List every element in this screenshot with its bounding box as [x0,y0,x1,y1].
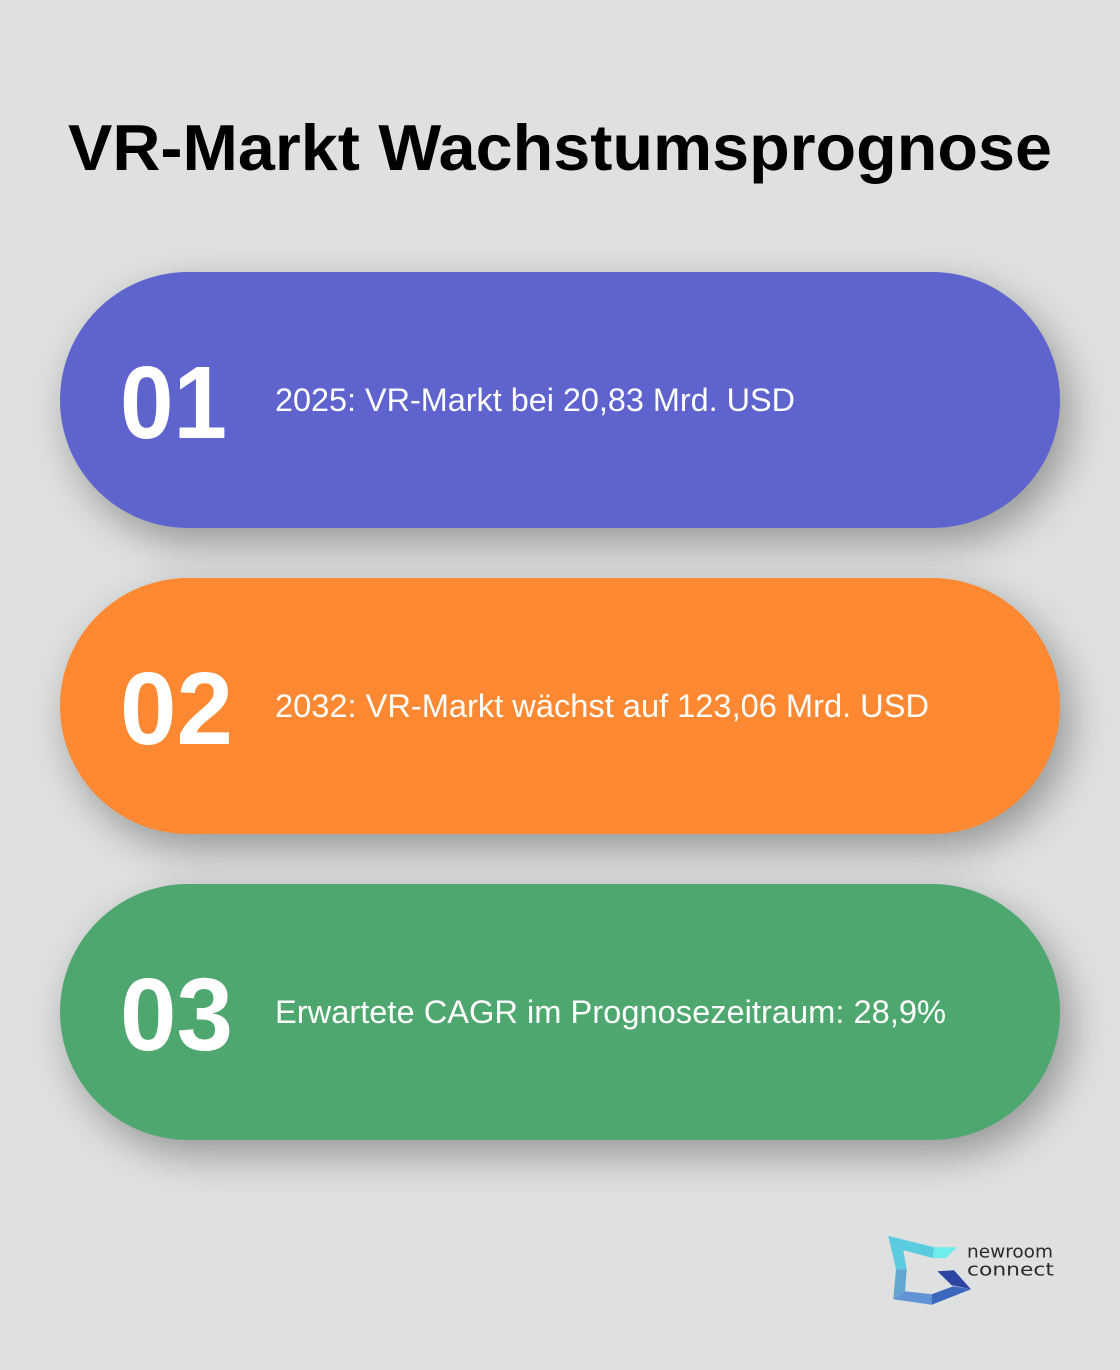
panel: 2025 market size [60,272,1060,528]
panel: 2032 market size [60,578,1060,834]
logo: newroom connect: newroom [967,1242,1053,1263]
panel: CAGR [60,884,1060,1140]
title: VR-Markt Wachstumsprognose [68,111,1052,184]
step number 01: 01 [120,345,227,460]
text: 2032: 2032: VR-Markt wächst auf 123,06 Mrd. USD [275,688,929,724]
step number 03: 03 [120,957,233,1072]
text: 2025: 2025: VR-Markt bei 20,83 Mrd. USD [275,382,795,418]
text: CAGR: Erwartete CAGR im Prognosezeitraum: 28,9% [275,994,946,1030]
logo: newroom connect: connect [967,1260,1054,1281]
step number 02: 02 [120,651,233,766]
